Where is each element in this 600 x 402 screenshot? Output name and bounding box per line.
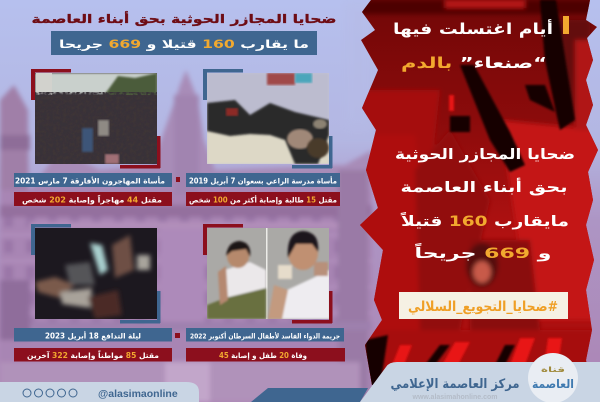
footer: media centre name: www.alasimahonline.com [412,394,497,401]
photo card: Eid charity night stampede [31,224,160,324]
subtitle banner: ما يقارب 160 قتيلا و 669 جريحا [59,37,309,52]
panel text: massacre summary: مايقارب 160 قتيلاً [400,212,569,230]
caption: school date [186,173,340,187]
photo card: migrants tragedy [31,69,160,168]
hashtag box [399,292,568,319]
subtitle banner [51,31,317,55]
caption: migrants date [14,173,172,187]
title: ضحايا المجازر الحوثية بحق أبناء العاصمة [32,11,336,27]
caption: stampede casualties: مقتل 85 مواطناً وإصابة 322 آخرين [27,349,159,360]
panel: red poster [355,0,600,390]
caption: school date: مأساة مدرسة الراعي بسعوان 7 أبريل 2019 [189,176,337,186]
panel heading: days Sanaa bathed in blood [393,16,569,72]
panel text: massacre summary: بحق أبناء العاصمة [400,178,568,196]
footer: social handle bar [0,382,199,402]
caption: cancer children casualties [186,348,345,362]
caption: cancer children casualties: وفاة 20 طفل و إصابة 45 [219,351,307,360]
photo card: cancer children crime [203,224,332,324]
panel heading: days Sanaa bathed in blood: “صنعاء” بالدم [401,54,547,72]
caption: migrants date: مأساة المهاجرون الأفارقة 7 مارس 2021 [15,176,165,186]
photo card: Al-Raee school tragedy [203,69,332,168]
caption: stampede date [14,328,172,342]
panel text: massacre summary: و 669 جريحاً [414,243,552,262]
logo: قناة [541,366,566,374]
caption: stampede date: ليلة التدافع 18 أبريل 2023 [45,330,141,340]
caption: cancer children date: جريمة الدواء الفاسد لأطفال السرطان أكتوبر 2022 [190,332,340,340]
panel text: massacre summary: ضحايا المجازر الحوثية [395,147,575,163]
bullet marker: top row [176,177,180,182]
caption: school casualties: مقتل 15 طالبة وإصابة أكثر من 100 شخص [189,194,337,204]
caption: migrants casualties [14,192,172,206]
bullet marker: bottom row [175,333,180,338]
hashtag box: #ضحايا_التجويع_السلالي [408,299,558,315]
logo: العاصمة [532,377,574,391]
footer: social handle bar: @alasimaonline [98,388,178,400]
caption: stampede casualties [14,348,172,362]
footer: media centre name: مركز العاصمة الإعلامي [390,377,520,392]
caption: school casualties [186,192,340,206]
footer: media centre name [360,362,600,402]
panel heading: days Sanaa bathed in blood: أيام اغتسلت فيها [393,19,553,38]
footer: blue accent [251,388,368,402]
logo [528,353,578,402]
panel text: massacre summary [395,147,575,262]
caption: migrants casualties: مقتل 44 مهاجراً وإصابة 202 شخص [22,194,162,204]
caption: cancer children date [186,328,344,342]
